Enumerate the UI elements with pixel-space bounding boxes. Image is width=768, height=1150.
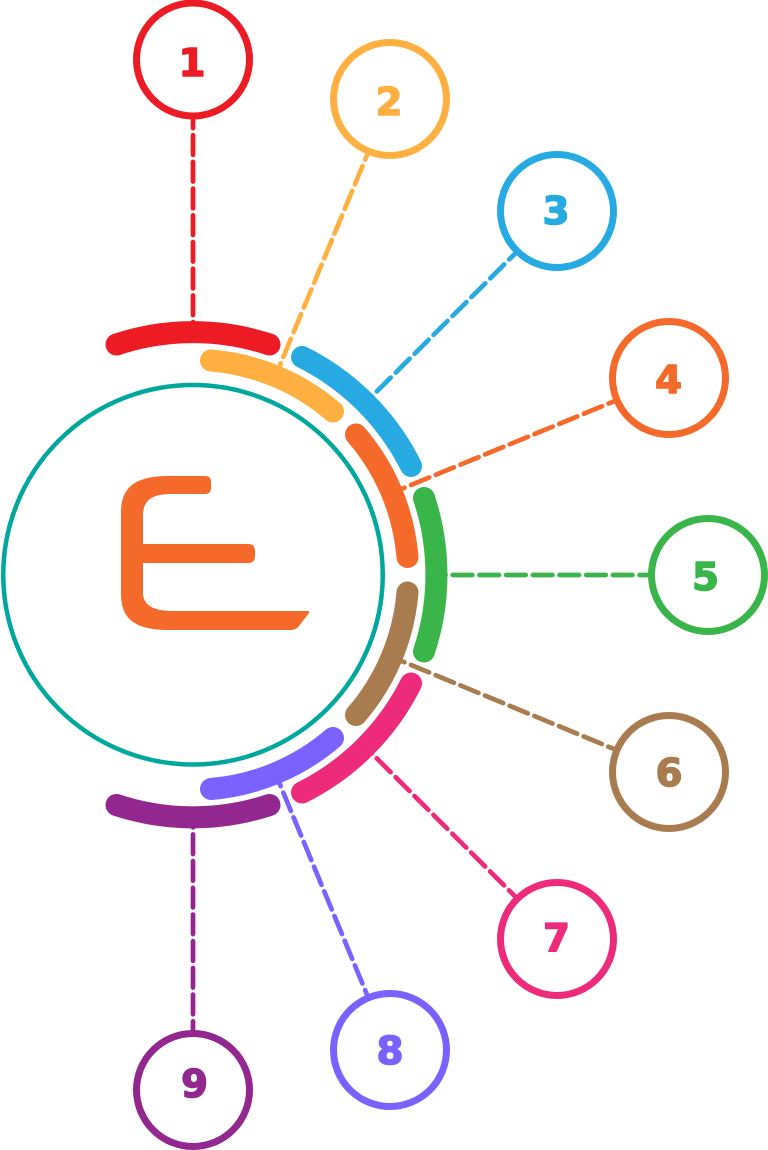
- item 1: 1: [179, 41, 205, 86]
- item 6: [356, 592, 726, 828]
- item 4: [356, 322, 726, 557]
- item 3: [302, 154, 614, 466]
- item 7: 7: [543, 916, 570, 961]
- logo: letter E: [121, 476, 309, 630]
- item 4: 4: [655, 358, 682, 403]
- item 9: 9: [181, 1062, 208, 1107]
- item 5: 5: [692, 555, 719, 600]
- item 5: [424, 498, 764, 652]
- center circle: [3, 385, 383, 764]
- item 1: [116, 3, 270, 344]
- item 2: 2: [376, 80, 402, 125]
- item 6: 6: [656, 751, 682, 796]
- item 3: 3: [543, 189, 569, 234]
- item 2: [211, 42, 446, 412]
- item 8: 8: [377, 1029, 403, 1074]
- item 8: [211, 738, 446, 1106]
- item 9: [116, 805, 270, 1146]
- item 7: [302, 684, 614, 996]
